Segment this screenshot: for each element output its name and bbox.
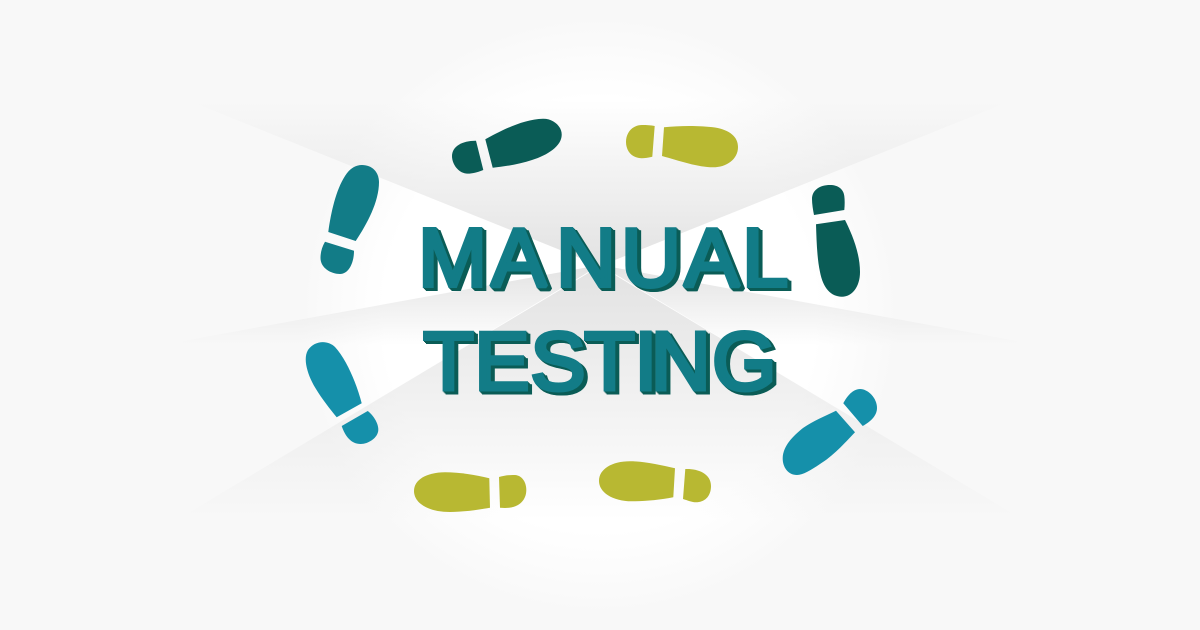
icon: olive footprint bottom left [414,472,526,512]
icon: teal footprint left [320,165,379,274]
icon: blue footprint lower right [783,389,877,475]
title: TESTING [423,315,777,408]
title [418,211,788,408]
icon: dark green footprint top left [452,119,562,174]
icon: olive footprint top right [626,125,738,167]
title: MANUAL [418,211,788,304]
icon: blue footprint lower left [306,342,378,444]
icon: olive footprint bottom right [599,461,711,502]
icon: dark green footprint right [812,185,860,297]
